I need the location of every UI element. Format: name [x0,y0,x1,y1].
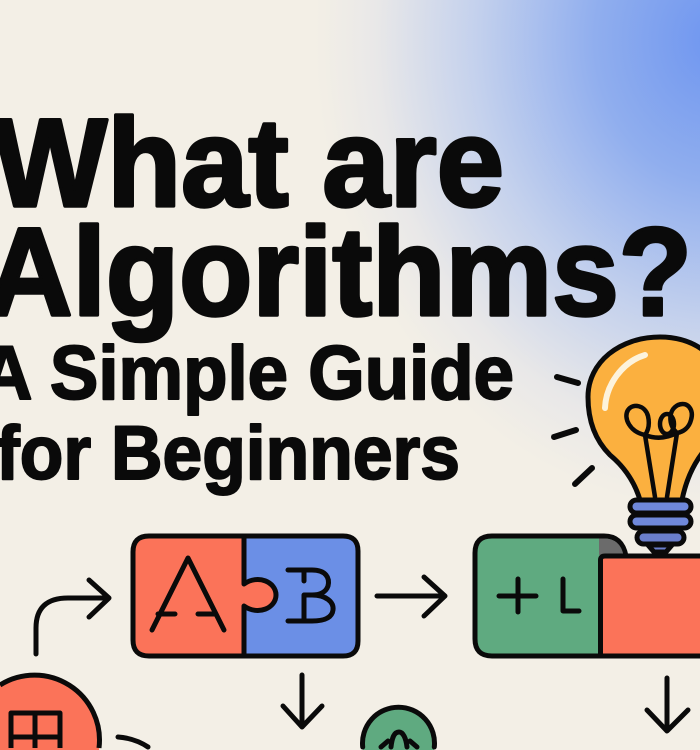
plus sign [499,579,536,612]
bulb highlight [605,355,645,408]
arrow: curved lower left [118,737,148,747]
title [0,94,692,342]
block: green and red [475,536,700,656]
letter B [288,570,333,621]
squiggle icon [381,732,417,747]
red block [600,556,700,656]
bulb rays [554,377,592,484]
subtitle [0,331,514,496]
arrow: down from green block [647,678,688,731]
block: blue B side [244,536,358,656]
block: red A side [133,536,276,656]
title: What are [0,94,504,233]
bulb base [630,500,691,552]
subtitle: for Beginners [0,411,460,496]
letter A [152,558,224,630]
grid icon [11,713,60,748]
bulb glass [588,337,700,500]
puzzle block A B [133,536,358,656]
bulb filament [626,404,692,497]
arrow: to green block [377,577,445,616]
green block [475,536,700,656]
letter L [563,579,579,611]
circle: red grid [0,675,100,750]
grey corner [599,538,624,555]
icon: light bulb [554,337,700,552]
arrow: down from A B [283,675,322,727]
arrows [36,577,688,747]
arrow: curved up to A B [36,580,109,654]
circle: green [362,707,435,750]
